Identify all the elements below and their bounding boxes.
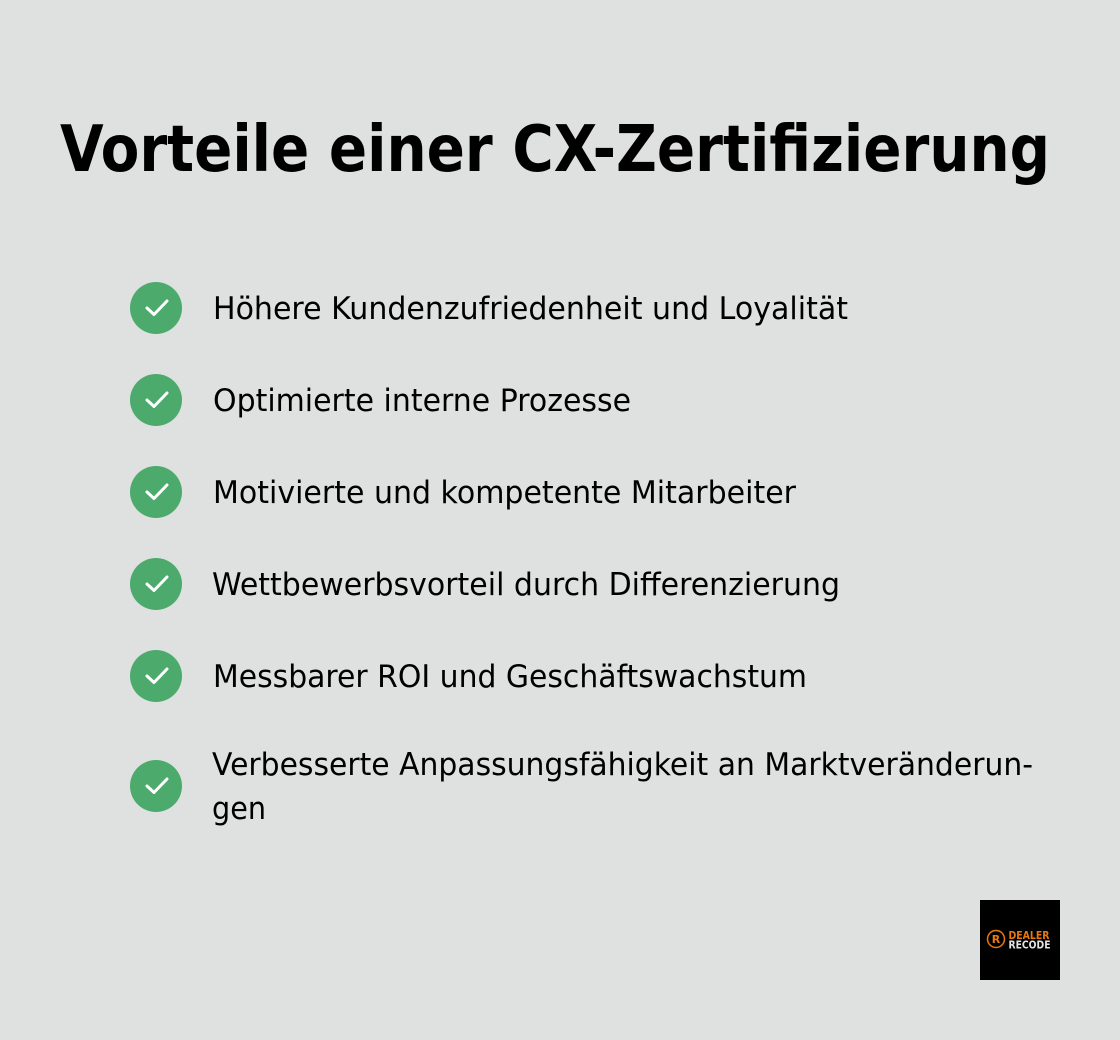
text: item 1: Höhere Kundenzufriedenheit und Loyalität (213, 291, 848, 327)
logo wordmark: RECODE (1008, 938, 1050, 952)
icon: check 5 (130, 650, 182, 702)
list item 5 (130, 650, 807, 702)
icon: check 3 (130, 466, 182, 518)
icon: check 1 (130, 282, 182, 334)
list item 4 (130, 558, 840, 610)
icon: check 4 (130, 558, 182, 610)
logo icon: R (992, 933, 1001, 946)
logo wordmark (1008, 929, 1050, 952)
logo wordmark: DEALER (1008, 929, 1050, 942)
text: item 6: Verbesserte Anpassungsfähigkeit an Marktveränderun- (212, 747, 1033, 783)
icon: check 6 (130, 760, 182, 812)
list item 1 (130, 282, 848, 334)
text: item 3: Motivierte und kompetente Mitarbeiter (213, 475, 796, 511)
list item 6 (130, 747, 1033, 827)
text: item 2: Optimierte interne Prozesse (213, 383, 631, 419)
text: item 4: Wettbewerbsvorteil durch Differenzierung (212, 567, 840, 603)
logo: Dealer Recode (980, 900, 1060, 980)
text: item 6 (212, 747, 1033, 827)
list item 2 (130, 374, 631, 426)
list item 3 (130, 466, 796, 518)
icon: check 2 (130, 374, 182, 426)
text: item 6: gen (212, 791, 266, 827)
text: item 5: Messbarer ROI und Geschäftswachstum (213, 659, 807, 695)
